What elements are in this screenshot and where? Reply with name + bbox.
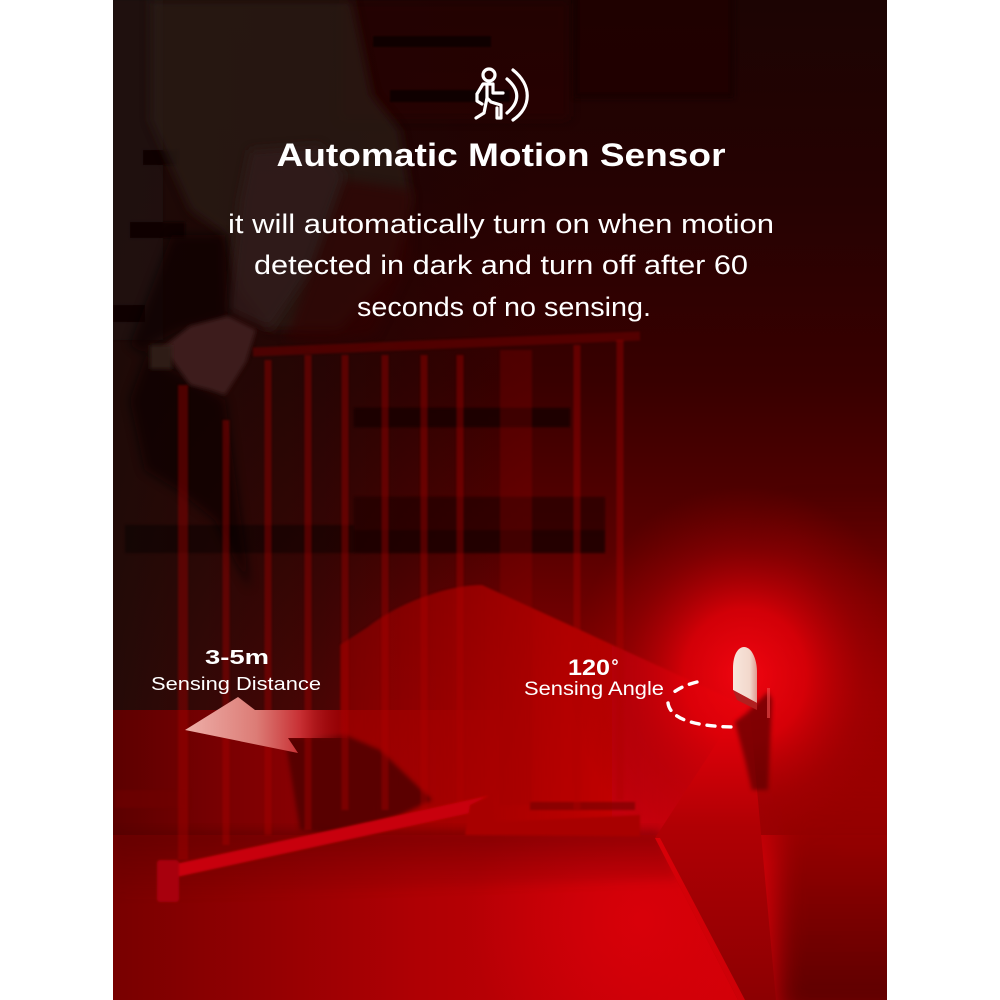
lower left band: [113, 710, 312, 835]
sensing angle label: 120: [568, 655, 610, 680]
description text: seconds of no sensing.: [357, 292, 651, 322]
infographic canvas: [113, 0, 887, 1000]
gate bottom rail: [157, 795, 640, 902]
picture frame on wall: [581, 80, 734, 98]
floor: [113, 835, 798, 1000]
sensing distance label: [151, 647, 321, 694]
sensing distance arrow: [185, 697, 347, 753]
sensing angle dashed arc: [668, 682, 738, 727]
beam wedge on wall: [655, 764, 776, 1000]
description text: detected in dark and turn off after 60: [254, 250, 748, 280]
light beam: [340, 585, 746, 840]
lamp glow: [600, 501, 880, 840]
title: Automatic Motion Sensor: [276, 137, 726, 173]
socket plate: [735, 688, 772, 790]
sensing distance label: 3-5m: [205, 647, 269, 669]
sensing distance label: Sensing Distance: [151, 674, 321, 694]
right wall: [762, 538, 887, 1000]
staircase background: [114, 36, 510, 322]
hand on the gate: [160, 316, 256, 395]
sensing angle label: °: [611, 656, 619, 676]
icon: motion sensor: [476, 69, 527, 120]
person leg shadow: [285, 735, 432, 835]
safety gate: [183, 336, 640, 860]
person silhouette: [130, 0, 412, 590]
description text: [228, 209, 774, 322]
sensing angle label: Sensing Angle: [524, 679, 664, 700]
sensing angle label: [525, 659, 663, 699]
stair shadows behind gate: [125, 408, 605, 553]
lamp: [733, 647, 757, 710]
description text: it will automatically turn on when motion: [228, 209, 774, 239]
lower stair shadows: [115, 790, 635, 810]
